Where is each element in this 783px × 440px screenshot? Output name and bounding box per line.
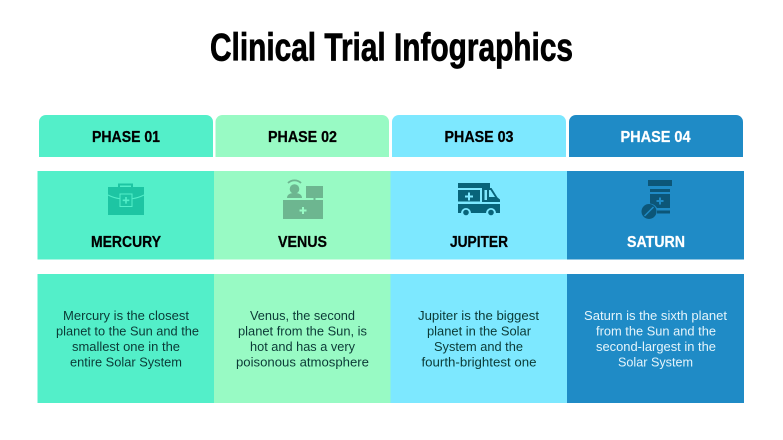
title: Clinical Trial Infographics [210, 26, 573, 70]
description text: poisonous atmosphere [236, 354, 369, 370]
icon: pill bottle [642, 180, 672, 219]
panel: venus [214, 171, 390, 260]
phase 04 tab: PHASE 04 [620, 129, 691, 146]
panel: venus description [214, 274, 390, 403]
icon: reception desk [283, 180, 323, 219]
description text: System and the [434, 339, 523, 354]
phase 01 tab [39, 115, 213, 157]
description text [418, 308, 539, 370]
description text: hot and has a very [250, 339, 355, 354]
panel: mercury [38, 171, 214, 260]
description text [584, 308, 727, 370]
phase 01 tab: PHASE 01 [92, 129, 160, 146]
panel: jupiter description [390, 274, 567, 403]
phase 02 tab: PHASE 02 [268, 129, 337, 146]
description text: planet in the Solar [427, 324, 532, 338]
description text: entire Solar System [70, 354, 182, 370]
description text: Venus, the second [250, 308, 355, 323]
label: JUPITER [450, 234, 508, 251]
description text: planet to the Sun and the [56, 324, 199, 338]
description text [56, 308, 199, 370]
description text: fourth-brightest one [422, 354, 536, 370]
phase 03 tab: PHASE 03 [444, 129, 514, 146]
description text: Jupiter is the biggest [418, 308, 539, 323]
label: SATURN [627, 234, 685, 251]
phase header row [39, 115, 743, 157]
label: MERCURY [91, 234, 162, 251]
description text: Saturn is the sixth planet [584, 308, 727, 323]
description text: Solar System [618, 354, 693, 370]
icon: medical briefcase [108, 184, 144, 215]
panel: saturn description [567, 274, 744, 403]
description text: from the Sun and the [596, 324, 716, 338]
label: VENUS [278, 234, 327, 251]
panel: saturn [567, 171, 744, 260]
phase 03 tab [392, 115, 566, 157]
panel: jupiter [390, 171, 567, 260]
description text: Mercury is the closest [63, 308, 189, 323]
icon: ambulance [458, 183, 500, 215]
panel: mercury description [38, 274, 214, 403]
description text: planet from the Sun, is [238, 324, 367, 338]
description text [236, 308, 369, 370]
description text: second-largest in the [596, 339, 716, 354]
description text: smallest one in the [72, 339, 180, 354]
phase 02 tab [216, 115, 389, 157]
phase 04 tab [569, 115, 743, 157]
